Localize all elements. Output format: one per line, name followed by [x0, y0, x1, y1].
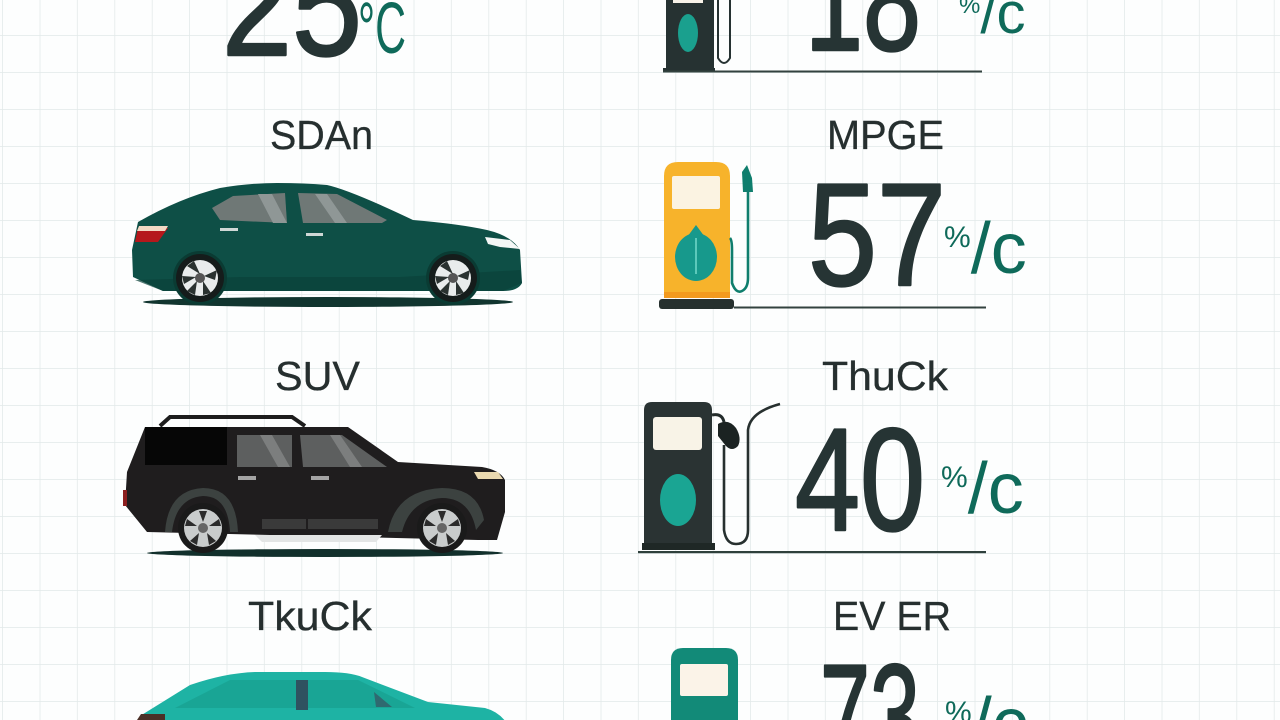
icon: dark fuel pump with hose: [642, 402, 780, 550]
sill trim: [262, 519, 378, 529]
label: EV ER: EV ER: [833, 593, 951, 639]
label: TkuCk: TkuCk: [248, 593, 373, 639]
window reflections: [260, 435, 362, 467]
icon: teal fuel pump: [671, 648, 738, 720]
unit: %: [941, 461, 968, 494]
unit: /c: [971, 209, 1027, 289]
label: MPGE: MPGE: [827, 112, 944, 158]
baseline: [663, 70, 982, 72]
door handles: [238, 476, 329, 480]
panel: ThuCk pump: [638, 353, 1024, 561]
tail light: [123, 490, 127, 506]
label: ThuCk: ThuCk: [822, 353, 949, 399]
unit: /c: [968, 449, 1024, 529]
unit: %: [944, 221, 971, 254]
wheel arches: [173, 251, 227, 305]
panel: top-right cropped pump: [663, 0, 1025, 81]
panel: EV ER pump: [671, 593, 1028, 720]
door handles: [220, 228, 323, 236]
panel: SUV: [123, 353, 505, 557]
panel: top-left cropped value: [222, 0, 406, 86]
baseline: [734, 306, 986, 308]
panel: teal car: [137, 593, 508, 720]
baseline: [638, 551, 986, 553]
headlight: [485, 237, 520, 249]
icon: green sedan: [132, 183, 522, 307]
tail light: [135, 228, 168, 242]
running board: [255, 535, 382, 542]
headlight: [474, 472, 503, 479]
roof rack: [160, 417, 305, 426]
icon: dark fuel pump: [663, 0, 730, 72]
shadow: [143, 297, 513, 307]
front wheel: [417, 503, 467, 553]
value 40: 40: [795, 398, 925, 561]
window reflections: [258, 194, 347, 223]
value 57: 57: [808, 153, 946, 316]
side windows: [237, 435, 387, 467]
panel: sedan: [132, 112, 522, 307]
panel: MPGE pump: [659, 112, 1027, 316]
icon: yellow fuel pump: [659, 162, 753, 309]
shadow: [147, 549, 503, 557]
tinted rear window: [145, 427, 227, 465]
front wheel: [429, 254, 477, 302]
label: SDAn: SDAn: [270, 112, 373, 158]
icon: teal car: [137, 672, 508, 720]
front window: [298, 193, 387, 223]
rear wheel: [176, 254, 224, 302]
fender flares: [165, 488, 238, 532]
label: SUV: SUV: [275, 353, 361, 399]
rear wheel: [178, 503, 228, 553]
icon: black SUV: [123, 417, 505, 557]
rear window: [212, 193, 287, 223]
